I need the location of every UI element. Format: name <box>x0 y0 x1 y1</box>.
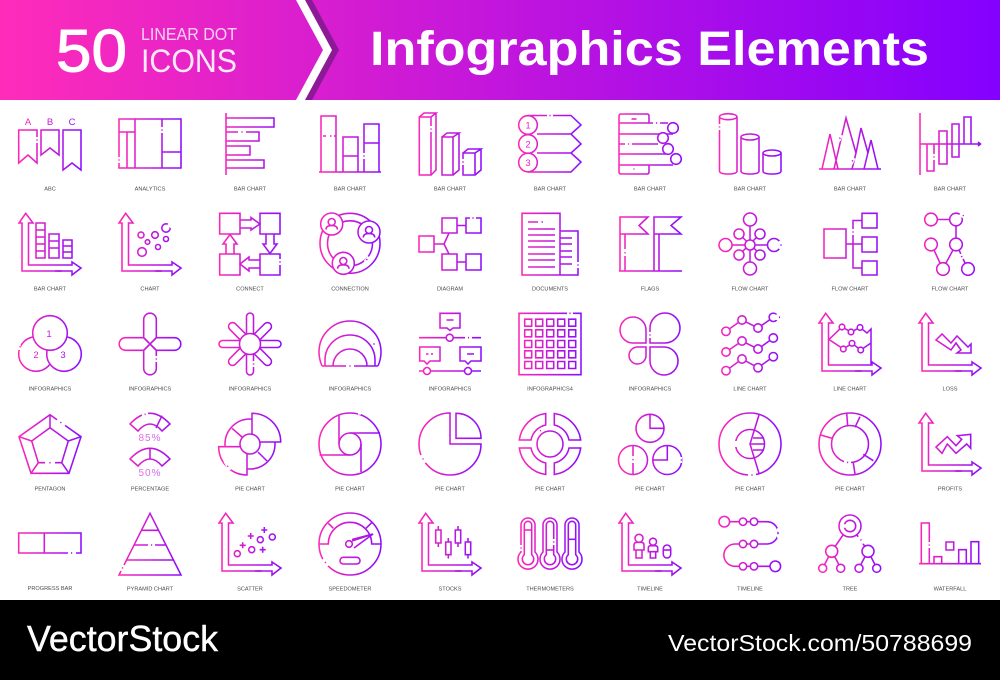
item: ABC <box>19 117 81 192</box>
item: Stocks <box>419 513 481 592</box>
item: ABC: C <box>69 117 76 128</box>
item: Infographics cross: INFOGRAPHICS <box>129 386 172 392</box>
item: Analytics <box>119 119 181 192</box>
item: Infographics venn: INFOGRAPHICS <box>29 386 72 392</box>
item: Infographics grid: INFOGRAPHICS4 <box>527 386 573 392</box>
item: Flow chart network: FLOW CHART <box>732 286 769 292</box>
item: Flow chart nodes <box>925 213 974 292</box>
item: ABC: A <box>25 117 32 128</box>
item: Bar chart numbered: 1 <box>525 120 531 132</box>
item: Bar chart numbered: 2 <box>525 140 531 150</box>
item: Bar chart peaks: BAR CHART <box>834 186 867 192</box>
item: Infographics venn: 1 <box>46 329 52 340</box>
item: Scatter: SCATTER <box>237 586 263 592</box>
footer image id: VectorStock.com/50788699 <box>668 630 972 656</box>
item: Pyramid chart: PYRAMID CHART <box>127 586 174 592</box>
item: Flow chart tree: FLOW CHART <box>832 286 869 292</box>
item: Timeline people: TIMELINE <box>637 586 663 592</box>
item: Pie chart trio <box>618 414 682 492</box>
item: Documents: DOCUMENTS <box>532 286 568 292</box>
item: Waterfall: WATERFALL <box>934 586 966 592</box>
item: Percentage: 85% <box>138 433 162 444</box>
item: Connect: CONNECT <box>236 286 264 292</box>
item: Line chart series: LINE CHART <box>733 386 767 392</box>
item: Bar chart diverging <box>920 113 980 192</box>
item: Infographics petals: INFOGRAPHICS <box>629 386 672 392</box>
item: Profits: PROFITS <box>938 486 962 492</box>
item: Pie chart ring <box>819 413 881 492</box>
item: Timeline path: TIMELINE <box>737 586 763 592</box>
item: Bar chart numbered <box>519 116 581 192</box>
item: Infographics sunburst: INFOGRAPHICS <box>229 386 272 392</box>
item: Line chart axis <box>819 313 881 392</box>
footer bar <box>0 600 1000 680</box>
item: Infographics grid <box>519 313 581 392</box>
item: Pie chart quadrant: PIE CHART <box>435 486 465 492</box>
item: Scatter <box>219 513 281 592</box>
item: Bar chart horizontal <box>226 113 274 192</box>
item: Documents <box>522 213 578 292</box>
item: Pentagon <box>19 415 81 492</box>
item: Bar chart numbered: 3 <box>525 158 531 169</box>
item: Speedometer <box>319 513 381 592</box>
header banner: 50 <box>56 18 127 84</box>
item: Bar chart 3D <box>419 113 481 192</box>
item: Bar chart phone <box>619 114 681 192</box>
item: Infographics venn <box>19 316 81 392</box>
item: Pie chart split: PIE CHART <box>735 486 765 492</box>
item: Infographics callouts <box>419 313 481 392</box>
item: Bar chart axis <box>19 213 81 292</box>
item: Timeline path <box>719 516 781 592</box>
item: Pentagon: PENTAGON <box>35 486 65 492</box>
item: Loss <box>919 313 981 392</box>
item: Bar chart horizontal: BAR CHART <box>234 186 267 192</box>
item: Profits <box>919 413 981 492</box>
header banner: LINEAR DOT <box>141 24 237 44</box>
item: Flags: FLAGS <box>641 286 659 292</box>
item: Connection: CONNECTION <box>331 286 369 292</box>
item: Infographics rainbow <box>319 321 381 392</box>
item: Bar chart diverging: BAR CHART <box>934 186 967 192</box>
item: Pie chart ring segments <box>519 414 581 492</box>
item: Connect <box>220 213 280 292</box>
item: Tree <box>819 515 881 592</box>
item: Infographics venn: 3 <box>60 350 66 361</box>
item: Bar chart columns: BAR CHART <box>334 186 367 192</box>
item: Pie chart shutter <box>319 413 381 492</box>
item: Bar chart numbered: BAR CHART <box>534 186 567 192</box>
item: Flags <box>619 217 682 292</box>
item: Infographics venn: 2 <box>33 350 39 361</box>
item: Analytics: ANALYTICS <box>135 186 166 192</box>
item: Diagram: DIAGRAM <box>437 286 463 292</box>
item: Flow chart nodes: FLOW CHART <box>932 286 969 292</box>
item: Chart: CHART <box>140 286 160 292</box>
item: Waterfall <box>919 523 981 592</box>
item: Line chart series <box>722 313 780 392</box>
header banner <box>0 0 1000 100</box>
item: Pie chart mixed <box>219 413 281 492</box>
item: Infographics rainbow: INFOGRAPHICS <box>329 386 372 392</box>
item: Stocks: STOCKS <box>439 586 462 592</box>
item: Progress bar: PROGRESS BAR <box>28 586 72 592</box>
item: ABC: ABC <box>44 186 56 192</box>
item: Percentage: 50% <box>138 468 162 479</box>
item: Percentage <box>130 413 170 492</box>
item: Flow chart tree <box>824 213 877 292</box>
header banner: Infographics Elements <box>370 23 929 76</box>
item: Bar chart cylinders: BAR CHART <box>734 186 767 192</box>
item: Bar chart phone: BAR CHART <box>634 186 667 192</box>
item: Percentage: PERCENTAGE <box>131 486 169 492</box>
header banner: ICONS <box>141 43 237 79</box>
item: Bar chart columns <box>319 116 381 192</box>
item: Chart <box>119 213 181 292</box>
item: Infographics cross <box>119 313 181 392</box>
item: Connection <box>320 213 380 292</box>
item: Line chart axis: LINE CHART <box>833 386 867 392</box>
item: Pie chart shutter: PIE CHART <box>335 486 365 492</box>
item: Bar chart axis: BAR CHART <box>34 286 67 292</box>
item: Infographics sunburst <box>219 313 281 392</box>
item: Pie chart quadrant <box>419 413 481 492</box>
item: Progress bar <box>19 533 81 592</box>
item: Speedometer: SPEEDOMETER <box>329 586 371 592</box>
item: Bar chart cylinders <box>720 114 781 192</box>
item: ABC: B <box>47 117 53 128</box>
item: Loss: LOSS <box>943 386 958 392</box>
item: Bar chart 3D: BAR CHART <box>434 186 467 192</box>
item: Infographics petals <box>620 313 680 392</box>
item: Pie chart trio: PIE CHART <box>635 486 665 492</box>
item: Pie chart ring: PIE CHART <box>835 486 865 492</box>
item: Thermometers: THERMOMETERS <box>526 586 574 592</box>
item: Pie chart mixed: PIE CHART <box>235 486 265 492</box>
item: Tree: TREE <box>843 586 858 592</box>
item: Flow chart network <box>719 213 781 292</box>
item: Pie chart split <box>719 413 781 492</box>
item: Pie chart ring segments: PIE CHART <box>535 486 565 492</box>
item: Infographics callouts: INFOGRAPHICS <box>429 386 472 392</box>
item: Pyramid chart <box>119 513 181 592</box>
item: Diagram <box>419 218 481 292</box>
item: Bar chart peaks <box>819 118 881 192</box>
footer logo: VectorStock <box>27 618 219 659</box>
item: Timeline people <box>619 513 681 592</box>
item: Thermometers <box>518 518 582 592</box>
